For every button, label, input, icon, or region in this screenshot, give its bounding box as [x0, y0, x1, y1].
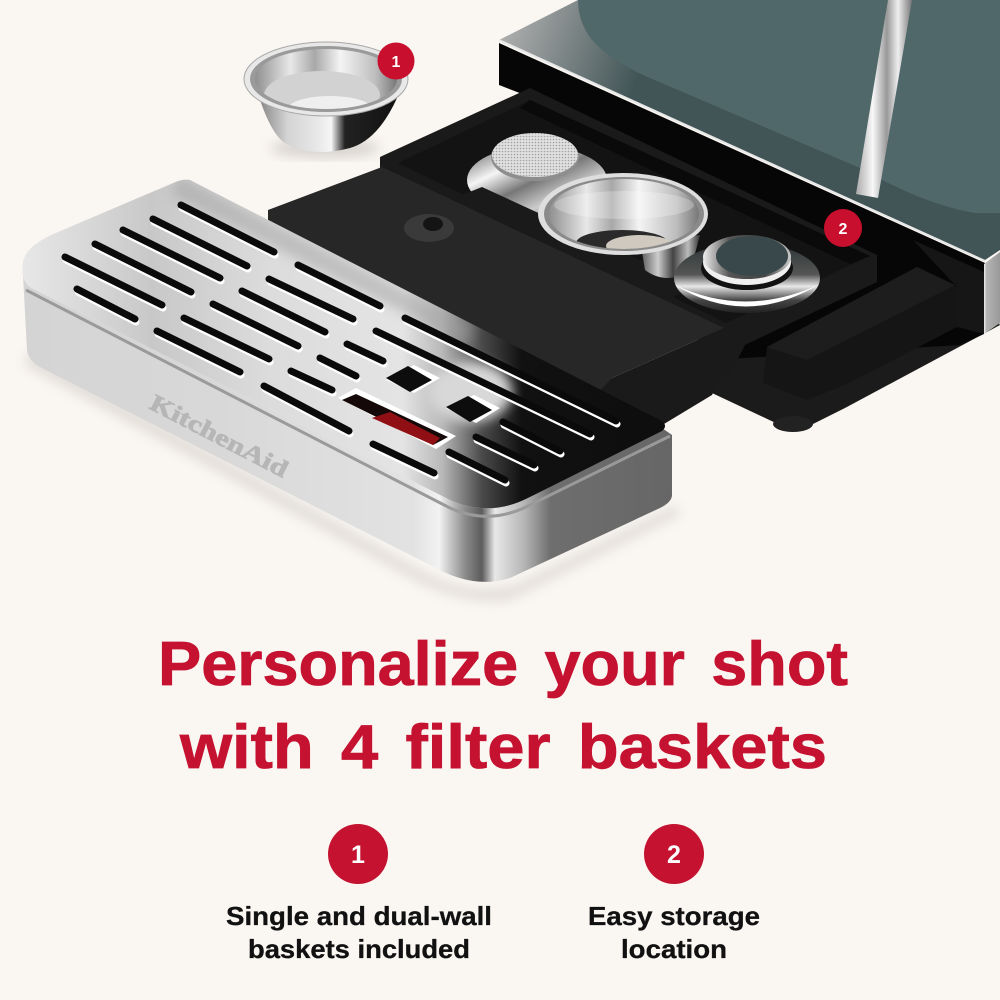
basket body: [260, 98, 397, 152]
feature 1 caption: Single and dual-wall: [226, 901, 492, 931]
feature 2 caption: [588, 901, 760, 964]
storage basket: mesh up: [467, 133, 607, 214]
right silver panel: [984, 252, 1000, 334]
title: [158, 630, 848, 782]
base silver edge: [499, 40, 985, 261]
tray shadow: [24, 350, 680, 601]
tray front side: [23, 275, 672, 582]
cavity right inner wall: [913, 240, 984, 334]
badge 1 on photo: 1: [392, 54, 401, 71]
compartment divider: [462, 187, 695, 298]
compartment outer: [380, 88, 877, 378]
storage basket: open: [538, 173, 708, 278]
drip tray handle block: [763, 267, 957, 400]
slot highlights: [66, 208, 617, 483]
lid peg: [404, 214, 454, 242]
machine black cavity: [499, 43, 985, 360]
feature 1 badge: 1: [351, 841, 365, 869]
lid side face: [596, 328, 727, 424]
plate upper band shading: [175, 185, 470, 335]
title: Personalize your shot: [158, 630, 848, 699]
steam wand: [856, 0, 912, 198]
badge 1 on photo: [378, 42, 414, 80]
square vent right: [446, 395, 500, 423]
machine foot: [773, 416, 813, 432]
compartment back wall: [520, 100, 870, 264]
loose filter basket: [244, 42, 408, 158]
tray lip: [26, 290, 670, 516]
feature 1 caption: [226, 901, 492, 964]
basket rim groove: [250, 46, 402, 112]
basket rim: [244, 42, 408, 116]
feature 2: [588, 824, 760, 964]
plate reflection: [428, 362, 512, 422]
machine floor: [712, 300, 1000, 429]
coffee machine base and body: [499, 0, 1000, 432]
tray top plate: [22, 180, 665, 508]
feature 2 badge: [644, 824, 704, 884]
basket shadow: [270, 138, 380, 158]
feature 1: [226, 824, 492, 964]
badge 2 on photo: 2: [839, 221, 848, 238]
title: with 4 filter baskets: [179, 713, 827, 782]
feature 1 badge: [328, 824, 388, 884]
lid top: [268, 167, 724, 400]
feature 2 caption: location: [621, 934, 727, 964]
red window: [338, 388, 456, 449]
square vent left: [386, 365, 440, 393]
KitchenAid logo: KitchenAid: [145, 390, 293, 484]
feature 1 caption: baskets included: [248, 934, 470, 964]
panel: storage compartment: [380, 88, 877, 378]
slots: [65, 205, 616, 480]
panel: tray lid: [268, 167, 727, 424]
machine base top: [499, 0, 1000, 260]
badge 2 on photo: [824, 209, 862, 247]
feature 2 caption: Easy storage: [588, 901, 760, 931]
feature 2 badge: 2: [667, 841, 681, 869]
basket inner: [255, 49, 397, 109]
compartment floor: [398, 100, 870, 323]
machine green body: [578, 0, 1000, 213]
storage basket: knob: [674, 235, 820, 313]
panel: drip tray: [22, 180, 672, 582]
